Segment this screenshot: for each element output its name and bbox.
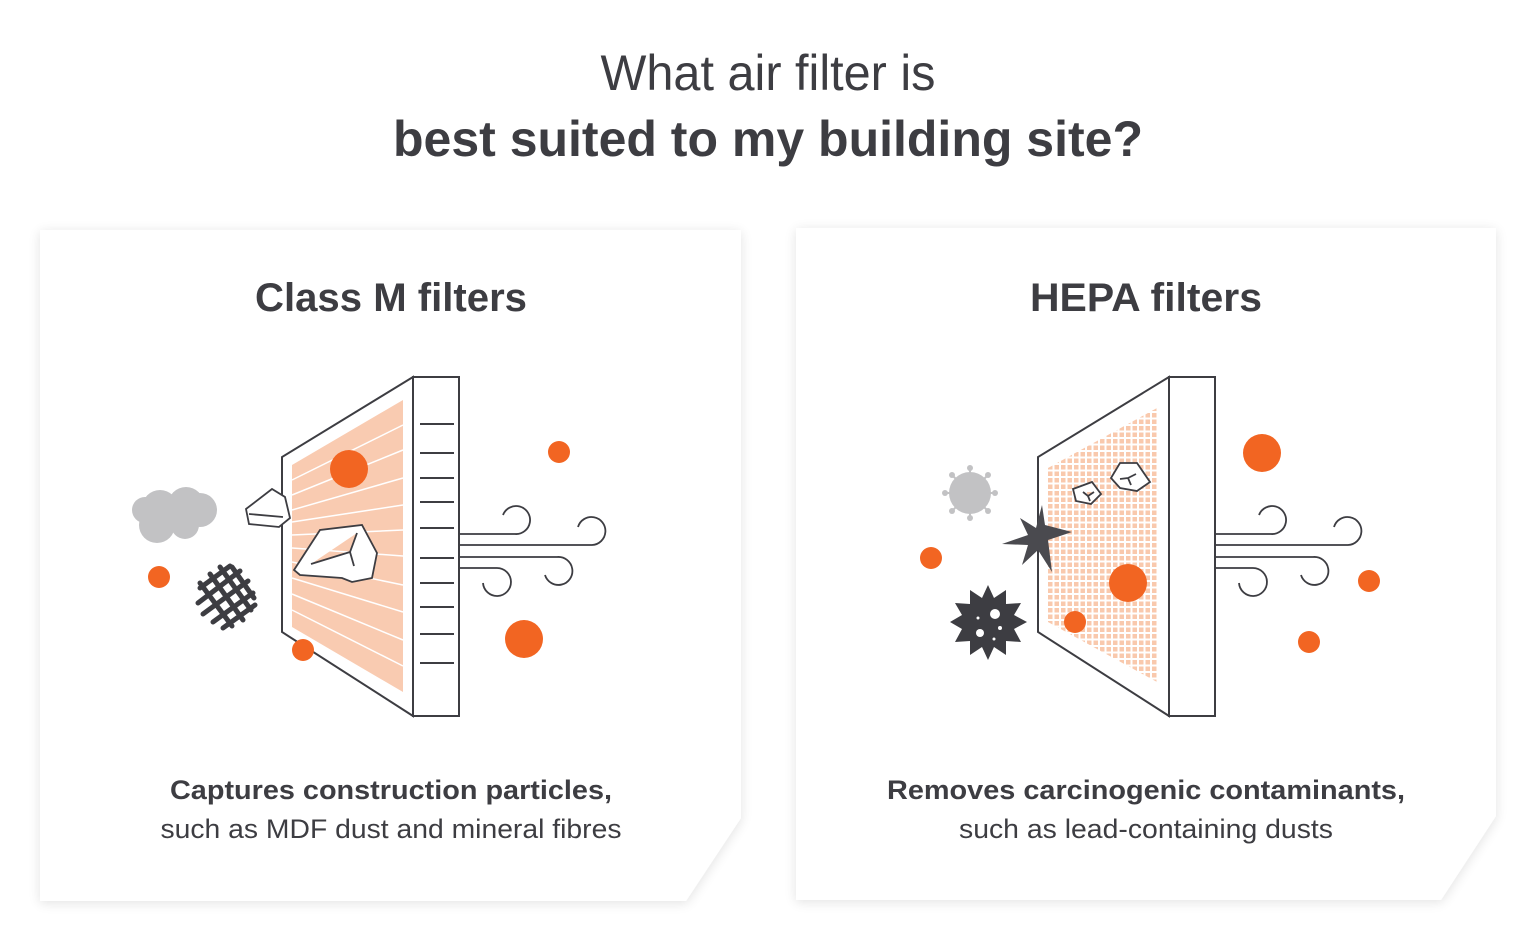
- caption: Removes carcinogenic contaminants,: [887, 775, 1405, 805]
- icon: stones: [1073, 482, 1101, 504]
- icon: air flow: [1215, 506, 1361, 596]
- particles: [920, 434, 1380, 653]
- icon: virus: [942, 465, 998, 521]
- panel: HEPA filters: [796, 228, 1496, 900]
- heading: HEPA filters: HEPA filters: [1030, 276, 1262, 320]
- panel: HEPA filters: such as lead-containing dusts: [959, 814, 1333, 844]
- icon: fibre mesh: [198, 566, 255, 628]
- icon: air flow: [459, 506, 605, 596]
- title: [393, 45, 1143, 167]
- caption: Captures construction particles,: [170, 775, 612, 805]
- panel: Class M filters: [40, 230, 741, 901]
- icon: dust cloud: [132, 487, 217, 543]
- title: What air filter is: [600, 45, 936, 101]
- heading: Class M filters: Class M filters: [255, 276, 527, 320]
- particles: [148, 441, 570, 661]
- illustration: HEPA filter: [920, 377, 1380, 716]
- icon: small stone: [246, 489, 290, 527]
- icon: germ: [950, 585, 1027, 660]
- panel: Class M filters: such as MDF dust and mineral fibres: [160, 814, 622, 844]
- title: best suited to my building site?: [393, 111, 1143, 167]
- illustration: Class M filter: [132, 377, 605, 716]
- icon: large stone: [294, 525, 377, 582]
- icon: burst: [1002, 505, 1072, 572]
